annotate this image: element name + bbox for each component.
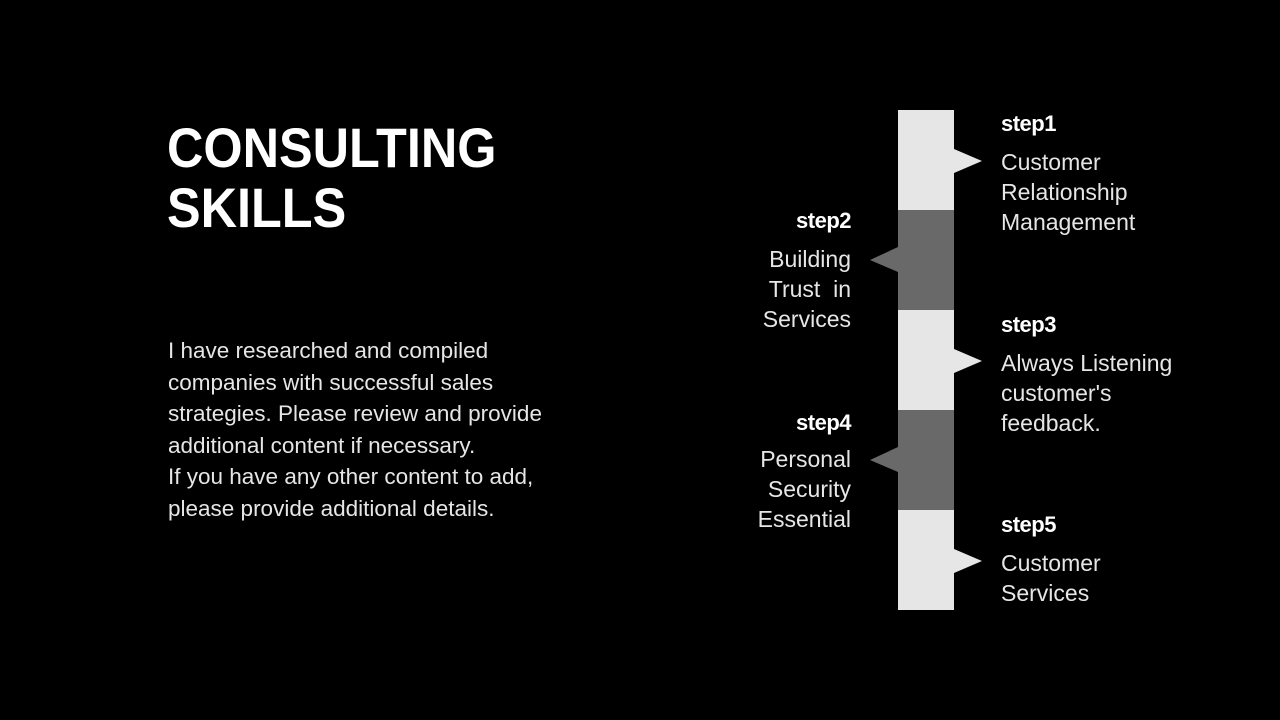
step3 <box>1001 312 1172 436</box>
step4 <box>758 410 852 532</box>
segment 4 <box>870 410 954 510</box>
title: SKILLS <box>167 176 346 239</box>
step5: Customer <box>1001 550 1101 576</box>
step2: Services <box>763 306 851 332</box>
segment 2 <box>870 210 954 310</box>
step1: Customer <box>1001 149 1101 175</box>
step2: step2 <box>796 208 851 233</box>
step1: Management <box>1001 209 1135 235</box>
segment 1 <box>898 110 982 210</box>
step4: Security <box>768 476 851 502</box>
step2: Trust in <box>769 276 851 302</box>
step4: Essential <box>758 506 851 532</box>
step2: Building <box>769 246 851 272</box>
body text <box>168 338 542 521</box>
step2 <box>763 208 851 332</box>
step5: Services <box>1001 580 1089 606</box>
title <box>167 116 496 239</box>
title: CONSULTING <box>167 116 496 179</box>
step4: step4 <box>796 410 851 435</box>
step1: Relationship <box>1001 179 1128 205</box>
step3: feedback. <box>1001 410 1101 436</box>
step1: step1 <box>1001 111 1056 136</box>
step5: step5 <box>1001 512 1056 537</box>
step1 <box>1001 111 1136 235</box>
step3: step3 <box>1001 312 1056 337</box>
step3: Always Listening <box>1001 350 1172 376</box>
body text: I have researched and compiled companies with successful sales strategies. Please review and provide additional content if necessary. <box>168 338 542 458</box>
step3: customer's <box>1001 380 1111 406</box>
segment 3 <box>898 310 982 410</box>
body text: If you have any other content to add, please provide additional details. <box>168 464 533 521</box>
step5 <box>1001 512 1101 606</box>
segment 5 <box>898 510 982 610</box>
step4: Personal <box>760 446 851 472</box>
